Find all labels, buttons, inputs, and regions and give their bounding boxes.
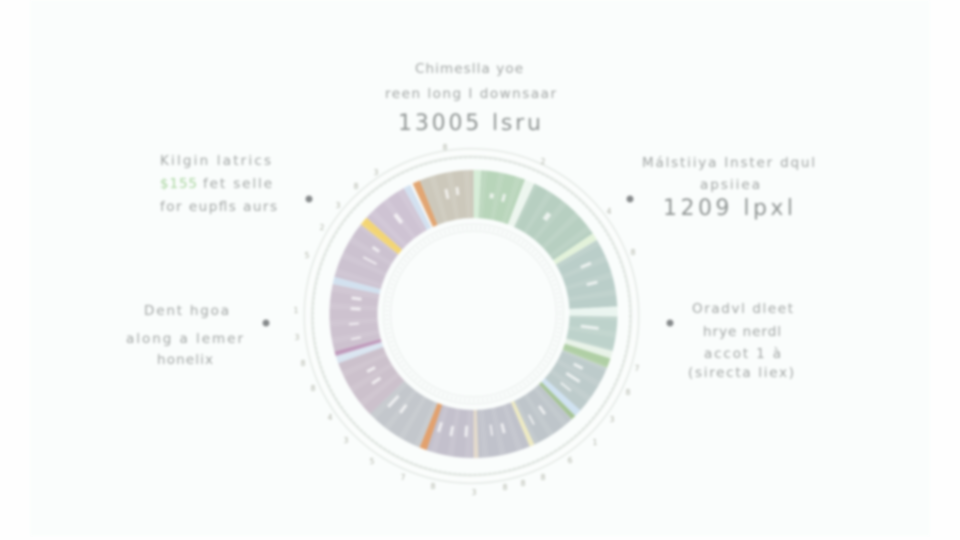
callout: top: reen long I downsaar [385, 86, 556, 102]
outer scale numbers: 8 [503, 483, 508, 492]
callout: lower left: Dent hgoa [144, 303, 229, 319]
radial bands overlay [354, 194, 594, 434]
outer scale numbers: 5 [305, 251, 310, 260]
ring segments [304, 144, 643, 484]
callout: upper left: fet selle [203, 176, 272, 192]
outer scale numbers [294, 143, 640, 497]
outer scale numbers: 8 [443, 143, 448, 152]
outer scale numbers: 1 [294, 306, 299, 315]
outer scale numbers: 1 [593, 438, 598, 447]
callout: upper left: Kilgin latrics [160, 153, 271, 169]
outer scale numbers: 3 [374, 168, 379, 177]
callout: upper right: 1209 lpxl [663, 196, 793, 221]
callout: top [385, 61, 556, 136]
callout: lower right: accot 1 à [704, 346, 781, 362]
outer scale numbers: 5 [370, 457, 375, 466]
outer scale numbers: 8 [301, 359, 306, 368]
outer scale numbers: 8 [631, 248, 636, 257]
callout: upper right [642, 155, 815, 221]
outer scale numbers: 8 [626, 388, 631, 397]
callout: lower left: honelix [157, 352, 213, 368]
outer scale numbers: 3 [336, 201, 341, 210]
outer scale numbers: 7 [635, 364, 640, 373]
outer scale numbers: 8 [521, 479, 526, 488]
outer thin ring [308, 152, 635, 480]
callout: lower right [688, 301, 794, 381]
callout: top: 13005 lsru [398, 111, 541, 136]
callout: lower right: hrye nerdl [703, 324, 781, 340]
outer scale numbers: 4 [328, 413, 333, 422]
callout: upper right: apsiiea [700, 177, 760, 193]
outer scale numbers: 4 [607, 207, 612, 216]
callout: lower left [126, 303, 243, 368]
outer scale numbers: 8 [311, 384, 316, 393]
outer scale numbers: 2 [320, 223, 325, 232]
outer scale numbers: 3 [295, 333, 300, 342]
callout: lower right: (sirecta liex) [688, 365, 794, 381]
callout: upper left: for eupfls aurs [160, 199, 277, 215]
outer scale numbers: 3 [344, 436, 349, 445]
outer scale numbers: 8 [431, 482, 436, 491]
circular chart [294, 143, 643, 497]
outer scale numbers: 3 [610, 415, 615, 424]
outer scale numbers: 6 [568, 456, 573, 465]
callout: top: Chimeslla yoe [415, 61, 523, 77]
segment white marks [349, 187, 599, 437]
outer scale numbers: 2 [541, 157, 546, 166]
callout: upper left: $155 [160, 176, 197, 192]
callout: upper right: Málstiiya Inster dqul [642, 155, 815, 171]
callout marker dots [262, 196, 674, 326]
outer scale numbers: 8 [541, 473, 546, 482]
outer scale numbers: 8 [354, 182, 359, 191]
outer scale numbers: 3 [472, 488, 477, 497]
callout: upper left [160, 153, 277, 215]
outer scale numbers: 7 [401, 473, 406, 482]
inner tick ring [384, 224, 564, 404]
callout: lower left: along a lemer [126, 331, 243, 347]
callout: lower right: Oradvl dleet [692, 301, 793, 317]
